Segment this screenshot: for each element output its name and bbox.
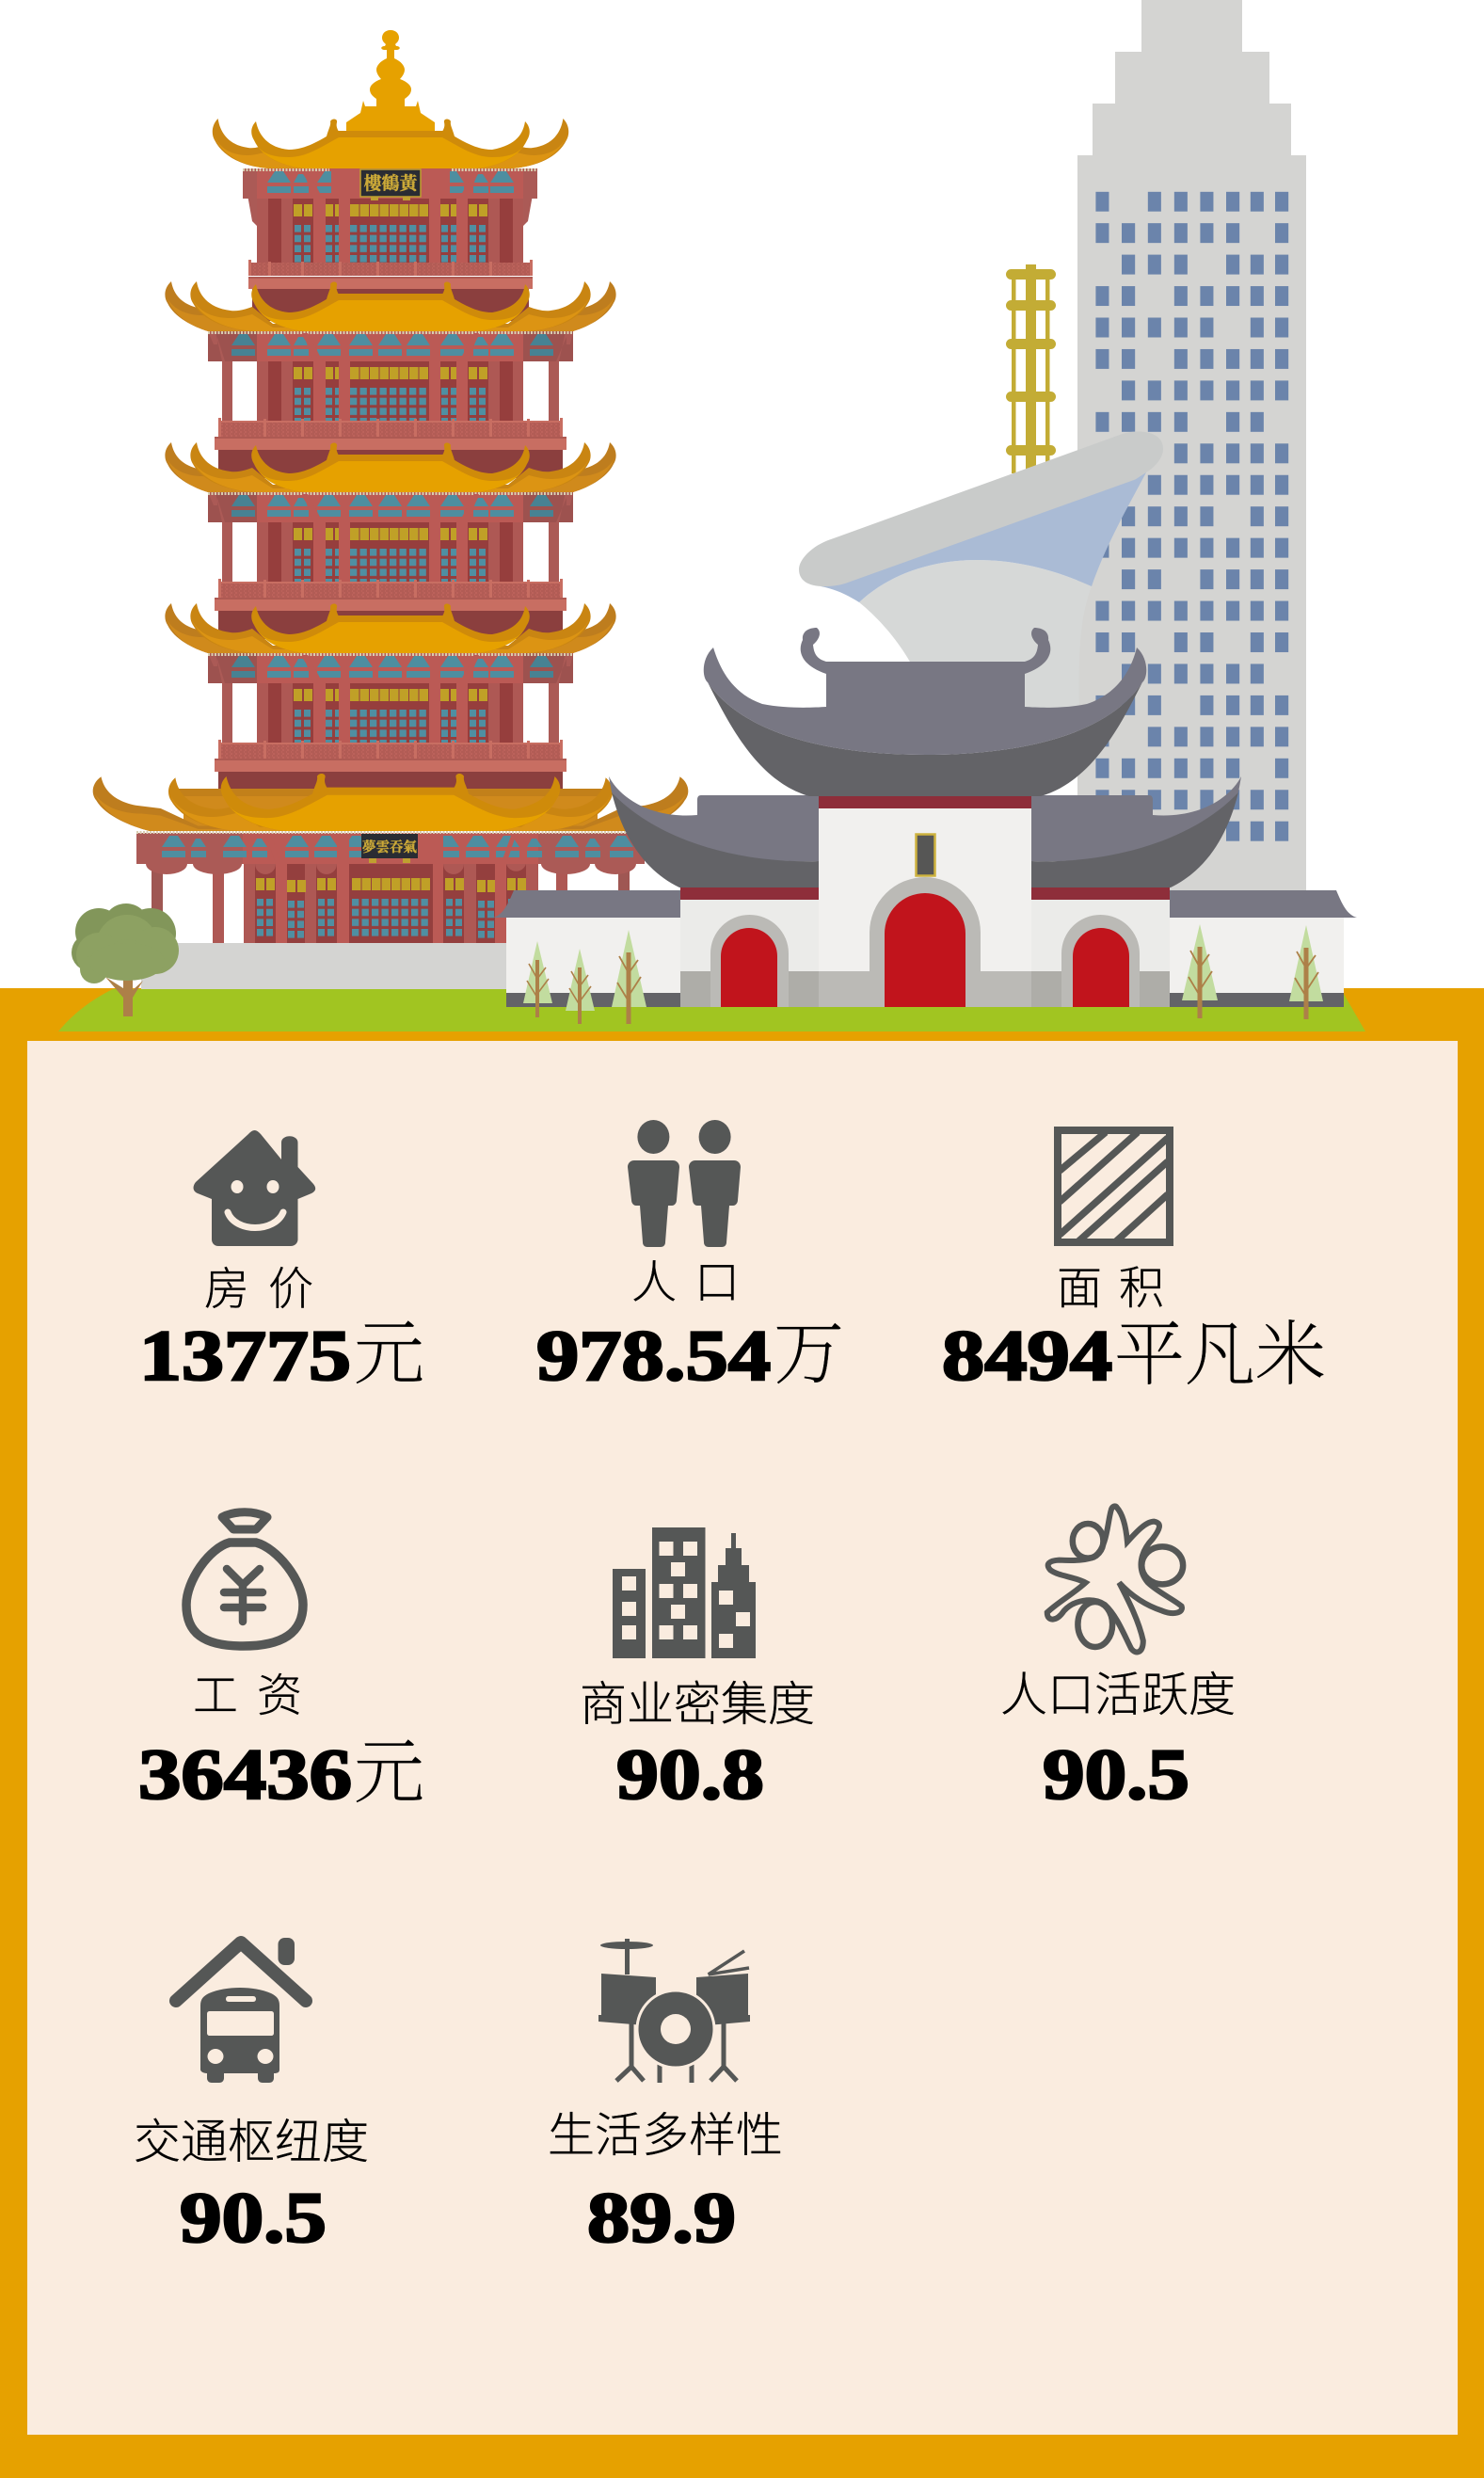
pagoda spire [346, 30, 435, 133]
value [139, 1316, 424, 1396]
plaque: ground tier: 夢雲吞氣 [362, 839, 417, 855]
grey pagoda plinth [141, 943, 518, 989]
stat: area [942, 1130, 1326, 1396]
value: 平凡米 [1114, 1317, 1326, 1395]
green lawn [58, 989, 1365, 1031]
icon: drum kit [598, 1939, 750, 2083]
icon: three linked figures [1047, 1506, 1183, 1652]
stat: population activity [1000, 1506, 1236, 1815]
stat: life diversity [548, 1939, 783, 2258]
label: 生活多样性 [548, 2109, 783, 2162]
label: 房价 [204, 1265, 313, 1315]
value: 13775 [139, 1317, 351, 1396]
tall office building [1077, 0, 1306, 890]
temple right half [1031, 776, 1357, 1007]
icon: smiling house [194, 1130, 315, 1246]
label: 人口 [631, 1258, 740, 1308]
plaque: Yellow Crane Tower: 樓鶴黃 [363, 173, 420, 194]
stat: salary [138, 1512, 424, 1815]
icon: two people [628, 1120, 741, 1247]
third tier [165, 442, 616, 639]
temple gate [493, 628, 1357, 1007]
value: 36436 [138, 1735, 352, 1815]
plaque: Yellow Crane Tower [360, 169, 421, 200]
value: 元 [354, 1316, 424, 1394]
value: 978.54 [536, 1317, 771, 1396]
value: 万 [774, 1316, 844, 1394]
value: 元 [354, 1735, 424, 1813]
round green tree [72, 903, 179, 1016]
sail shaped building [799, 432, 1163, 715]
stat: commercial density [580, 1527, 815, 1815]
label: 工资 [193, 1671, 302, 1721]
value [536, 1316, 844, 1396]
temple left half [493, 776, 819, 1007]
content panel [27, 1041, 1458, 2435]
temple upper roof [704, 628, 1146, 796]
plaque: ground tier [361, 834, 418, 863]
value [942, 1317, 1326, 1396]
value: 90.8 [616, 1735, 764, 1815]
Yellow Crane Tower pagoda [72, 30, 1357, 2258]
stat: house price [139, 1130, 424, 1396]
label: 面积 [1057, 1264, 1164, 1314]
ground tier [93, 774, 688, 943]
icon: hatched square [1058, 1130, 1170, 1242]
value: 90.5 [1043, 1735, 1189, 1815]
value [138, 1735, 424, 1815]
label: 商业密集度 [580, 1678, 815, 1731]
small cypress trees [523, 924, 1323, 1024]
value: 90.5 [180, 2179, 327, 2258]
label: 人口活跃度 [1000, 1669, 1236, 1721]
yellow lattice tower [1006, 264, 1056, 473]
icon: money bag [186, 1512, 303, 1646]
fourth tier [165, 603, 616, 800]
background orange frame [0, 988, 1484, 2478]
icon: skyline [613, 1527, 756, 1658]
stat: population [536, 1120, 844, 1396]
label: 交通枢纽度 [134, 2116, 369, 2168]
top tier [213, 119, 568, 321]
temple central hall [819, 796, 1031, 1007]
value: 8494 [942, 1317, 1112, 1396]
icon: bus under roof [176, 1938, 306, 2083]
second tier [165, 281, 616, 478]
value: 89.9 [587, 2179, 736, 2258]
stat: transit hub [134, 1938, 369, 2258]
